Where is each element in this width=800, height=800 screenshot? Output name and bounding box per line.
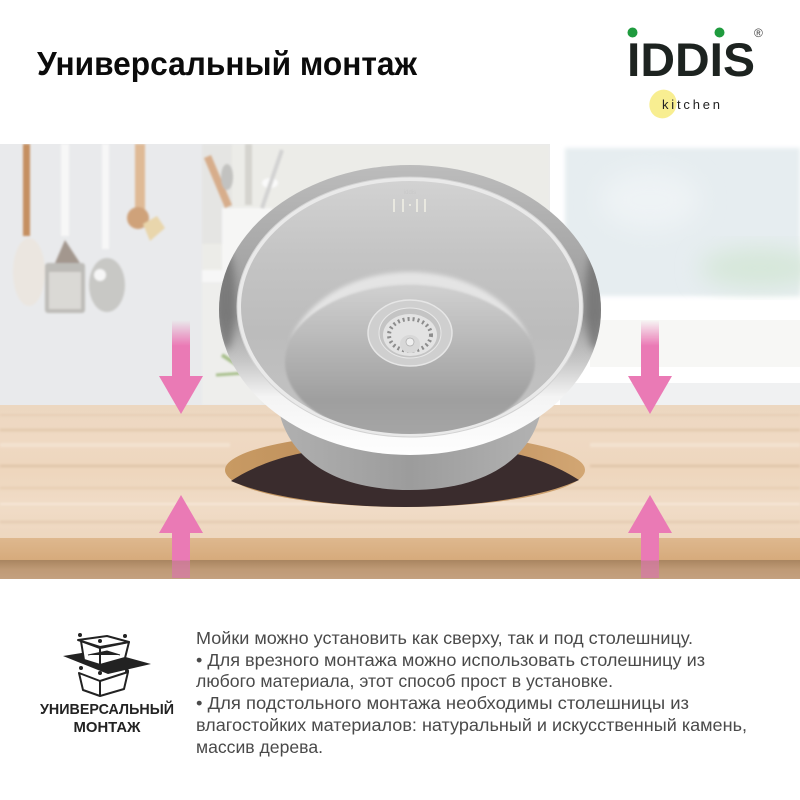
bowl floor	[285, 286, 535, 438]
description text: влагостойких материалов: натуральный и искусственный камень,	[196, 715, 747, 735]
table lower edge	[0, 560, 800, 579]
description text: Мойки можно установить как сверху, так и под столешницу.	[196, 628, 693, 648]
arrow: top right	[628, 320, 672, 414]
shelf unit	[202, 146, 272, 282]
photo: kitchen background	[0, 144, 800, 405]
wood grain	[0, 428, 800, 524]
sink bowl interior	[241, 181, 579, 433]
icon upper sink box	[78, 636, 129, 665]
icon fixing points	[78, 633, 129, 675]
table front edge	[0, 538, 800, 561]
sink	[216, 165, 605, 490]
description text: • Для подстольного монтажа необходимы столешницы из	[196, 693, 689, 713]
description text: массив дерева.	[196, 737, 323, 757]
hanging utensils	[13, 144, 165, 313]
sink outer rim	[219, 165, 601, 455]
logo green dot left	[628, 28, 638, 38]
description text: • Для врезного монтажа можно использовать столешницу из	[196, 650, 705, 670]
window	[550, 144, 800, 405]
overflow slots	[394, 199, 425, 212]
arrow: bottom right	[628, 495, 672, 578]
icon mounting plane	[63, 650, 151, 674]
drain strainer	[368, 300, 452, 366]
logo yellow blob	[645, 85, 681, 123]
icon lower sink box	[79, 672, 128, 696]
arrow: bottom left	[159, 495, 203, 578]
logo wordmark: IDDIS	[627, 33, 755, 86]
wall	[0, 144, 550, 405]
description text	[196, 628, 747, 757]
table top surface	[0, 405, 800, 539]
rim side shading	[216, 250, 605, 350]
sink bowl underside	[280, 415, 540, 490]
caption line 2: МОНТАЖ	[74, 719, 141, 736]
bowl walls and floor	[285, 272, 535, 438]
logo registered mark: ®	[754, 26, 763, 40]
blurred utensils on shelf	[204, 144, 282, 375]
icon caption	[40, 700, 174, 736]
logo: IDDIS kitchen	[627, 26, 763, 123]
brand mark: iddis	[404, 190, 416, 196]
hole wood wall	[225, 433, 585, 507]
title: Универсальный монтаж	[37, 45, 418, 82]
hole dark interior	[231, 450, 579, 507]
cut-out hole	[225, 433, 585, 507]
sink inner lip	[237, 177, 583, 437]
caption line 1: УНИВЕРСАЛЬНЫЙ	[40, 700, 174, 718]
icon: universal mounting	[63, 633, 151, 696]
arrow: top left	[159, 320, 203, 414]
description text: любого материала, этот способ прост в установке.	[196, 671, 613, 691]
logo green dot right	[714, 28, 724, 38]
logo kitchen label: kitchen	[662, 97, 720, 112]
wooden countertop	[0, 405, 800, 579]
bright ring around bowl floor	[292, 270, 527, 333]
overflow slots and brand	[394, 190, 425, 212]
